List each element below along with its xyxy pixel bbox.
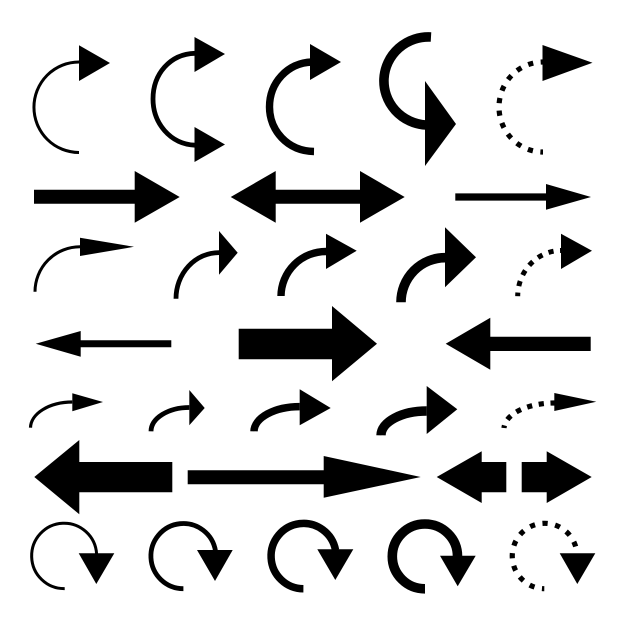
row 5: thin shallow curved arrow	[30, 393, 103, 428]
row 6: split right arrow	[522, 451, 592, 503]
row 3: medium curved arrow	[281, 234, 357, 296]
row 2: slim right arrow	[455, 184, 591, 210]
row 3: curved arrow	[176, 231, 238, 299]
row 5: medium shallow curved arrow	[254, 389, 331, 431]
row 1: heavy hook arrow	[384, 37, 456, 166]
row 2: bold right arrow	[34, 171, 180, 223]
row 6: split left arrow	[437, 451, 506, 503]
row 3: heavy curved arrow	[401, 227, 476, 302]
row 1: double-headed semicircle arrow	[153, 37, 225, 162]
row 5: heavy shallow curved arrow	[381, 386, 457, 435]
row 1: medium semicircle arrow	[270, 44, 341, 152]
row 1: dashed semicircle arrow	[499, 45, 592, 152]
row 6: large left arrow	[34, 440, 172, 514]
row 3: thin curved arrow with long head	[35, 238, 134, 292]
row 7: medium circular arrow	[271, 523, 353, 589]
row 4: large block right arrow	[239, 306, 377, 381]
row 3: dashed curved arrow	[518, 234, 592, 296]
row 1: thin semicircle arrow	[34, 45, 110, 152]
row 7: circular arrow	[151, 524, 233, 589]
row 4: bold left arrow	[446, 318, 591, 370]
row 7: thin circular arrow	[32, 523, 114, 589]
row 5: shallow curved arrow	[151, 390, 205, 431]
row 7: dashed circular arrow	[512, 523, 595, 589]
row 5: dashed shallow curved arrow	[504, 393, 596, 428]
row 4: slim left arrow	[36, 331, 171, 357]
row 7: heavy circular arrow	[392, 524, 476, 589]
row 6: long arrow with tapered head	[188, 456, 421, 498]
row 2: double-headed arrow	[231, 171, 405, 223]
